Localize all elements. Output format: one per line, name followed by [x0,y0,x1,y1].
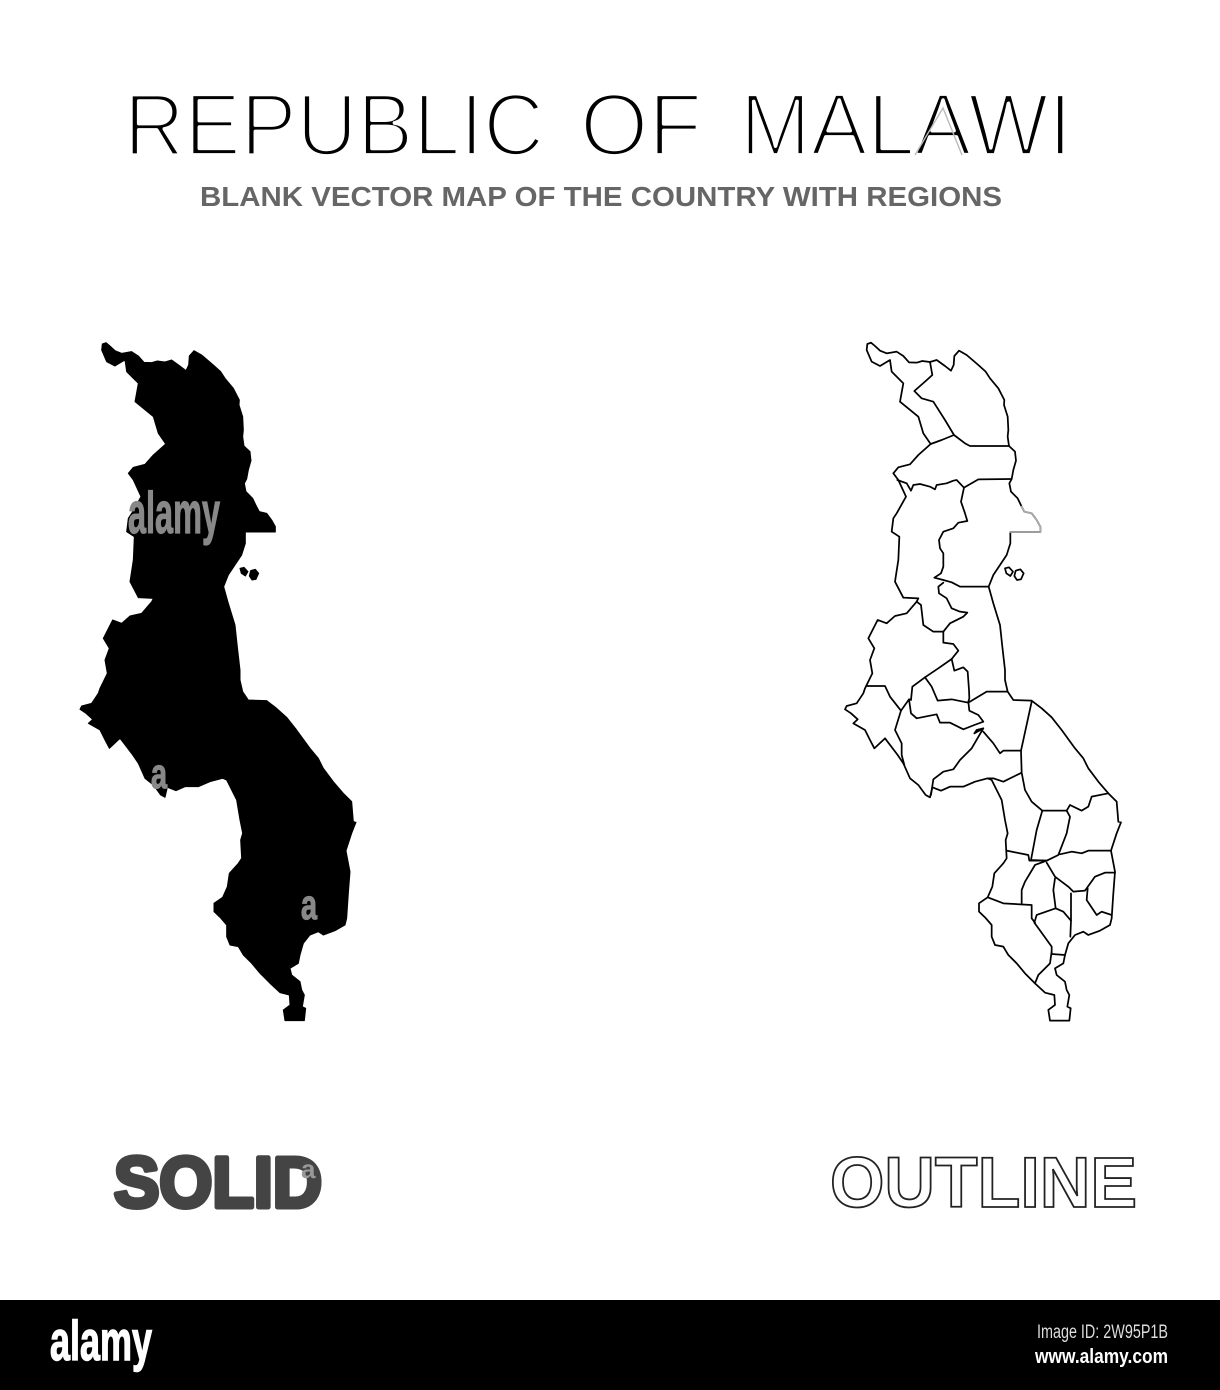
outline map of Malawi with regions [845,343,1121,1021]
watermark on solid map: alamy [128,481,220,546]
watermark on solid map [128,481,317,928]
watermark on solid map: a [301,881,317,928]
watermark in title [915,108,962,155]
title: OF [580,75,702,174]
solid map of Malawi [80,343,356,1021]
footer url: www.alamy.com [1034,1346,1168,1368]
title: REPUBLIC [124,75,544,174]
footer image id: Image ID: 2W95P1B [1037,1322,1168,1343]
watermark on solid label: a [301,1154,316,1184]
footer logo: alamy [50,1309,152,1372]
label: outline: OUTLINE [830,1144,1137,1223]
label: solid: SOLID [114,1144,322,1223]
footer bar [0,1300,1220,1390]
watermark on solid map: a [151,750,167,797]
title: MALAWI [740,75,1072,174]
title [124,75,1072,174]
subtitle: BLANK VECTOR MAP OF THE COUNTRY WITH REGIONS [200,181,1002,212]
